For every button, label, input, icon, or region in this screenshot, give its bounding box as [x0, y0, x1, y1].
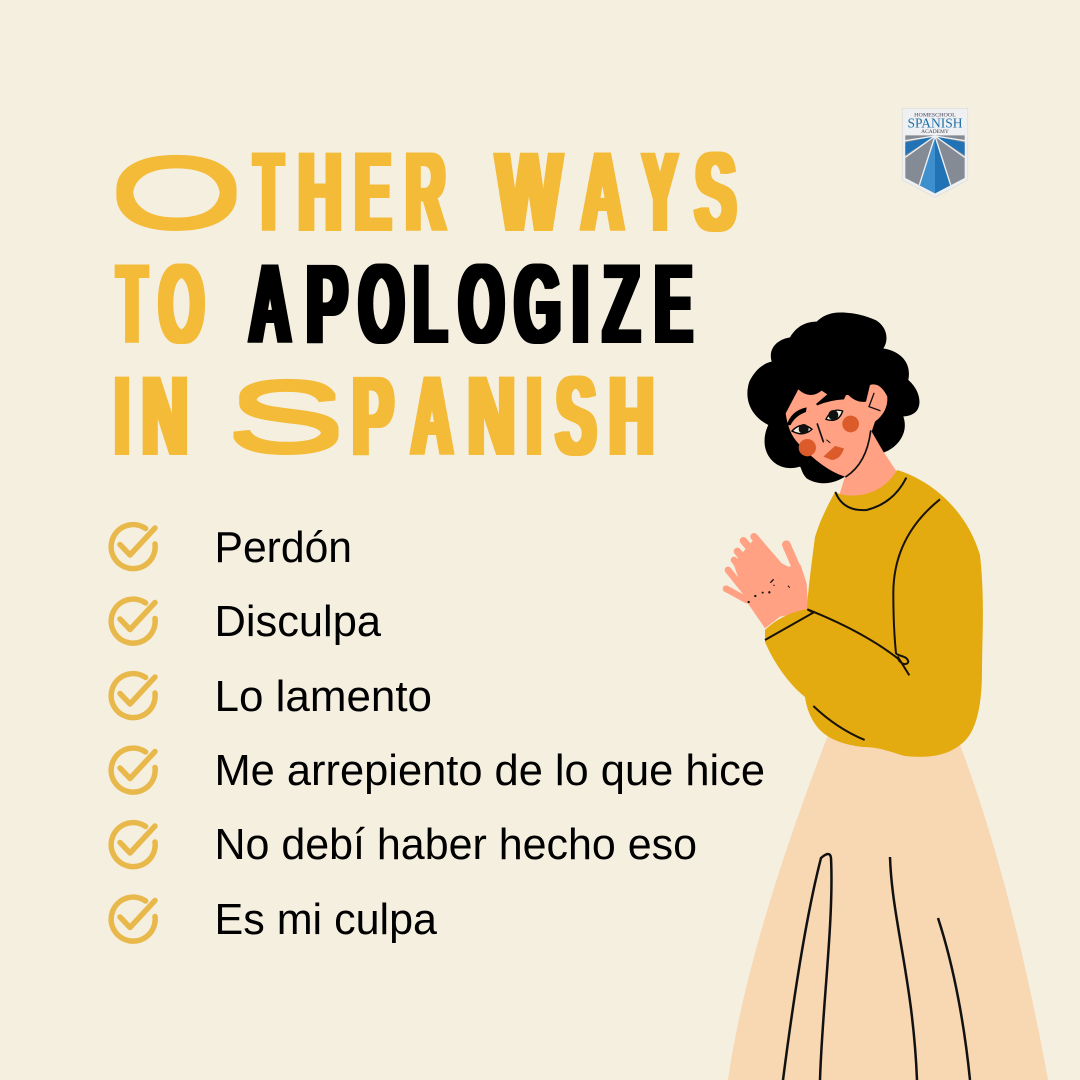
list of phrases	[214, 523, 765, 944]
title letter: wide S: S	[225, 361, 347, 472]
hair	[747, 313, 919, 483]
title word: apologize: A	[250, 242, 290, 366]
title line: in spanish: I	[115, 354, 129, 478]
title line: in spanish: N	[142, 354, 188, 478]
logo: Homeschool Spanish Academy shield	[902, 108, 968, 197]
check icons	[111, 525, 155, 941]
illustration: apologetic woman	[726, 313, 1048, 1080]
cheeks	[799, 416, 859, 456]
title word: apologize: L	[414, 242, 446, 366]
sweater seam lines	[765, 499, 940, 740]
checklist	[111, 523, 765, 944]
eyes and eyebrows	[787, 395, 846, 434]
title line: other ways: H	[298, 130, 342, 254]
title word: apologize: Z	[603, 242, 639, 366]
title line: other ways: W	[496, 130, 562, 254]
title line: to: O	[159, 242, 204, 366]
title line: other ways	[255, 130, 736, 254]
list of phrases: No debí haber hecho eso	[214, 820, 697, 869]
title word: apologize: O	[359, 242, 404, 366]
title line: in spanish: H	[609, 354, 654, 478]
title line: in spanish: S	[556, 354, 596, 478]
title line: other ways: A	[582, 130, 624, 254]
logo: Homeschool Spanish Academy shield: HOMESCHOOL	[914, 112, 956, 118]
list of phrases: Es mi culpa	[214, 895, 438, 944]
title line: in spanish: I	[527, 354, 541, 478]
mouth	[823, 446, 844, 460]
title word: apologize: P	[306, 242, 347, 366]
skirt	[728, 730, 1048, 1080]
list of phrases: Disculpa	[214, 597, 382, 646]
sweater	[765, 470, 983, 757]
title line: in spanish: A	[412, 354, 452, 478]
title line: other ways: R	[406, 130, 445, 254]
title	[108, 130, 736, 478]
title line: in spanish: N	[468, 354, 515, 478]
title word: apologize	[250, 242, 692, 366]
title line: in spanish: P	[352, 354, 393, 478]
title line: in spanish	[115, 354, 654, 478]
title line: other ways: Y	[643, 130, 677, 254]
title word: apologize: I	[572, 242, 588, 366]
nose and face lines	[817, 393, 880, 477]
collar line	[836, 478, 906, 510]
hand	[726, 537, 808, 628]
title word: apologize: O	[459, 242, 504, 366]
title line: other ways: T	[255, 130, 282, 254]
list of phrases: Me arrepiento de lo que hice	[214, 746, 765, 795]
title line: other ways: S	[695, 130, 736, 254]
list of phrases: Lo lamento	[214, 672, 432, 721]
title: E	[655, 242, 692, 366]
title word: apologize: G	[515, 242, 561, 366]
title line: other ways: E	[355, 130, 391, 254]
list of phrases: Perdón	[214, 523, 352, 572]
logo: Homeschool Spanish Academy shield: SPANISH	[907, 116, 963, 131]
title line: to: T	[118, 242, 146, 366]
logo: Homeschool Spanish Academy shield: ACADEMY	[921, 130, 950, 135]
neck and face	[786, 384, 900, 503]
title letter: wide O: O	[108, 137, 245, 248]
